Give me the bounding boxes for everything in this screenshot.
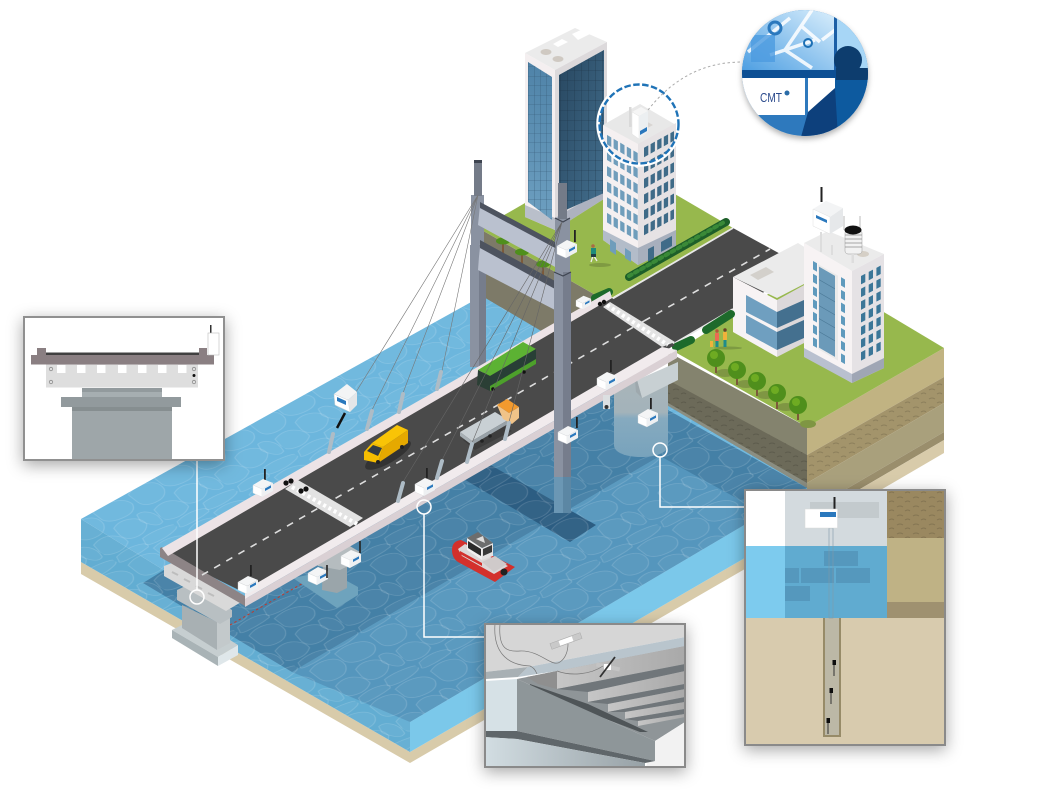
cable stays from back pylon	[356, 195, 478, 410]
back parapet rail	[162, 291, 612, 556]
right grass lot	[675, 268, 944, 427]
mid-rise office building	[603, 104, 676, 265]
runner	[589, 244, 611, 267]
callout ring: deck underside	[417, 500, 486, 637]
rollers far joint	[598, 300, 606, 306]
water block	[81, 296, 807, 763]
deck sensor D	[597, 360, 617, 409]
large cable sensor	[334, 384, 357, 428]
hedge, front road	[595, 292, 731, 347]
inset panel: deck underside	[485, 624, 685, 767]
upper cross beam	[478, 202, 557, 268]
water column	[746, 546, 887, 618]
embankment soil	[887, 491, 944, 618]
red dashed cable	[230, 578, 312, 625]
hedge, back road	[629, 221, 726, 277]
deck sensor A	[253, 469, 273, 497]
inset pier	[61, 388, 181, 459]
pylon sensor lower	[558, 417, 578, 444]
back pylon	[470, 160, 486, 367]
roof sensor enclosure	[629, 107, 653, 139]
red patrol boat	[452, 532, 515, 582]
road beyond the bridge	[610, 228, 806, 343]
front deck beam	[245, 347, 677, 607]
people group	[710, 328, 742, 350]
CMT wordmark: CMT	[760, 91, 782, 105]
dashed highlight circle	[598, 83, 680, 165]
inset sensor	[208, 325, 219, 355]
pylon sensor upper	[557, 230, 577, 258]
deck sensor C	[415, 468, 435, 496]
strain gauges	[550, 633, 620, 677]
front pylon shadow on water	[462, 463, 596, 542]
front pylon	[554, 183, 571, 513]
expansion joint near left	[285, 480, 363, 527]
dotted connector to control room	[648, 62, 742, 110]
pier sensor	[638, 398, 658, 427]
deck centre line	[202, 321, 644, 575]
displacement rollers	[283, 478, 309, 494]
girders	[517, 646, 685, 741]
green bus	[477, 342, 536, 391]
right soil block, front layers	[807, 348, 944, 533]
control room photo	[742, 10, 869, 137]
slab underside	[485, 624, 685, 679]
under-deck girders at left end	[164, 560, 248, 611]
right tall building	[804, 231, 884, 383]
tall glass tower	[525, 28, 607, 230]
middle pier	[293, 545, 360, 608]
right low building	[733, 243, 806, 357]
back soil block	[480, 229, 606, 380]
back grass lot	[480, 155, 733, 301]
inset panel: scour borehole	[745, 490, 945, 745]
inset panel: bearing elevation	[24, 317, 224, 460]
flatbed truck	[460, 399, 519, 450]
far joint sensor	[576, 296, 591, 309]
cable anchor posts, far side	[329, 372, 441, 452]
hanging planters between pylons	[496, 238, 550, 276]
lower cross beam	[478, 240, 555, 310]
callout ring: pier scour	[653, 443, 746, 507]
borehole	[823, 528, 841, 737]
cable anchor posts, near side	[398, 423, 509, 501]
right pier	[614, 362, 678, 457]
yellow van	[361, 425, 415, 475]
data logger	[805, 497, 838, 528]
inset deck	[31, 348, 214, 364]
weather station on roof	[813, 187, 869, 263]
cable stays from front pylon	[403, 222, 562, 482]
air and pier	[746, 491, 887, 546]
sensor wires	[495, 624, 603, 674]
expansion joint near right	[603, 302, 675, 347]
main beam	[485, 679, 655, 767]
deck sensor B	[238, 565, 258, 594]
bridge deck road	[160, 298, 675, 606]
row of trees	[707, 349, 816, 428]
left abutment	[172, 584, 238, 666]
under-deck sensors at middle pier	[308, 541, 361, 585]
lower right void	[646, 722, 685, 767]
inset girder band	[46, 364, 198, 388]
callout ring: abutment	[190, 461, 204, 604]
buried probes	[826, 660, 836, 734]
right soil block, river side	[668, 352, 807, 490]
